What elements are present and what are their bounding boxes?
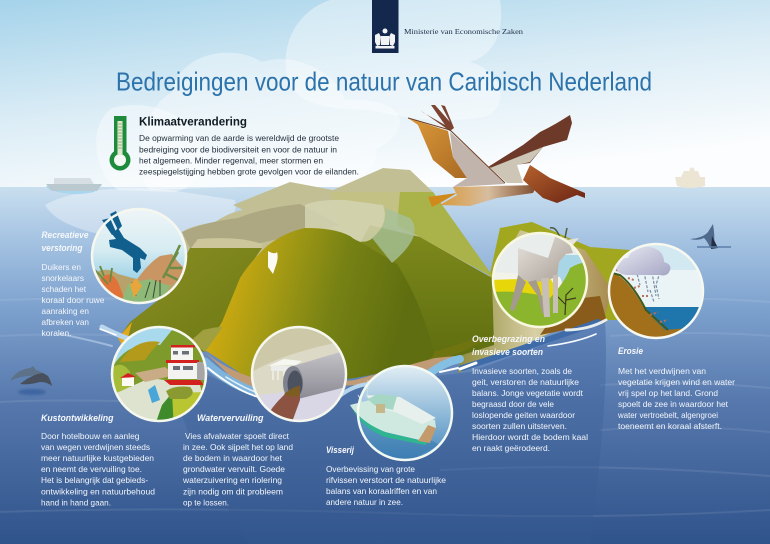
circle rim [112, 327, 206, 421]
body: overbegrazing: Invasieve soorten, zoals de [472, 366, 572, 376]
body: recreatieve verstoring: koralen. [42, 328, 72, 338]
whale tail [690, 224, 731, 249]
light green right slope [397, 192, 494, 278]
background sky [0, 0, 770, 188]
circle rim [358, 366, 452, 460]
foam and waves [60, 320, 606, 400]
body: recreatieve verstoring: schaden het [42, 284, 87, 294]
body: watervervuiling: op te lossen. [183, 498, 229, 508]
pelican [408, 105, 585, 207]
body: erosie: Met het verdwijnen van [618, 366, 706, 376]
body: overbegrazing: balans. Jonge vegetatie wordt [472, 388, 584, 398]
ministry name: Ministerie van Economische Zaken [404, 27, 523, 36]
body: erosie [617, 366, 735, 431]
ministry logo [372, 0, 523, 53]
body: watervervuiling: de bodem in waardoor het [183, 453, 283, 463]
island [118, 168, 630, 392]
klimaat body: zeespiegelstijging hebben grote gevolgen voor de eilanden. [139, 166, 359, 176]
circle illustration: fishing boat [350, 365, 455, 465]
klimaat body [139, 133, 359, 176]
body: kustontwikkeling [41, 431, 155, 508]
klimaat heading: Klimaatverandering [139, 116, 247, 128]
goat figure [510, 228, 579, 317]
body: visserij [326, 464, 446, 507]
body: overbegrazing: en raakt geërodeerd. [472, 443, 550, 453]
overbegrazing text block [472, 334, 588, 453]
body: visserij: Overbevissing van grote [326, 464, 415, 474]
right dark hill [340, 225, 494, 362]
body: recreatieve verstoring: afbreken van [42, 317, 89, 327]
shore sand [205, 352, 455, 392]
body: erosie: spoelt de zee in waardoor het [618, 399, 729, 409]
eroding slope [610, 274, 682, 337]
tan goat slope [458, 230, 612, 373]
klimaat body: het algemeen. Minder regenval, meer stormen en [139, 156, 323, 166]
small house [120, 373, 136, 386]
body: kustontwikkeling: en neemt de vervuiling toe. [41, 464, 142, 474]
body: watervervuiling [182, 431, 293, 508]
body: overbegrazing [472, 366, 588, 453]
plant [556, 288, 576, 315]
circle illustration: erosion [608, 242, 704, 340]
body: recreatieve verstoring: koraal door ruwe [42, 295, 105, 305]
body: kustontwikkeling: ontwikkeling en natuurbehoud [41, 486, 155, 496]
boat [350, 380, 436, 445]
distant ship right [675, 168, 705, 188]
body: watervervuiling: zijn nodig om dit probleem [183, 486, 283, 496]
body: overbegrazing: soorten zullen uitsterven. [472, 421, 567, 431]
rear wing grey [450, 132, 505, 187]
body: overbegrazing: loslopende geiten waardoor [472, 410, 575, 420]
rear wing feathers [420, 105, 454, 131]
heading: overbegrazing [472, 334, 545, 358]
rain cloud [616, 247, 670, 275]
klimaat body: De opwarming van de aarde is wereldwijd de grootste [139, 133, 339, 143]
panel: recreatieve verstoring [42, 230, 105, 338]
body: recreatieve verstoring: Duikers en [42, 262, 81, 272]
body: kustontwikkeling: meer natuurlijke kustgebieden [41, 453, 154, 463]
body: visserij: balans van koraalriffen en van [326, 486, 437, 496]
left hill [120, 248, 262, 352]
diver figure [102, 211, 147, 273]
rear wing orange [408, 118, 467, 178]
clouds behind title [45, 0, 501, 244]
pipe [294, 352, 345, 398]
heading: recreatieve verstoring [42, 230, 89, 254]
body: erosie: water vertroebelt, algengroei [617, 410, 718, 420]
deep water around island [120, 322, 606, 544]
body: erosie: vegetatie krijgen wind en water [618, 377, 735, 387]
dolphins [10, 366, 52, 395]
body: visserij: andere natuur in zee. [326, 497, 403, 507]
circle rim [493, 233, 587, 327]
background sea [0, 187, 770, 544]
rain [636, 275, 660, 302]
body: watervervuiling: in zee. Ook sijpelt het op land [183, 442, 293, 452]
heading: recreatieve verstoring: verstoring [42, 243, 83, 254]
distant boat left [46, 178, 102, 194]
pelican body [440, 185, 537, 206]
body: overbegrazing: Hierdoor wordt de bodem kaal [472, 432, 588, 442]
body: watervervuiling: waterzuivering en riolering [182, 475, 282, 485]
body: kustontwikkeling: Door hotelbouw en aanleg [41, 431, 140, 441]
erosie text block [617, 346, 735, 431]
body: overbegrazing: geit, verstoren de natuurlijke [472, 377, 579, 387]
heading: overbegrazing: Overbegrazing en [472, 334, 545, 345]
circle rim [609, 244, 703, 338]
circle illustration: waste water pipe [250, 325, 350, 425]
logo ribbon [372, 0, 398, 53]
circle rim [92, 209, 186, 303]
pelican head and pouch [523, 165, 585, 203]
klimaatverandering text block [139, 116, 359, 176]
coat of arms [375, 28, 395, 48]
house on stilts [268, 359, 302, 380]
pelican feet [428, 193, 457, 207]
body: kustontwikkeling: hand in hand gaan. [41, 498, 111, 508]
discharge [271, 386, 300, 420]
heading: overbegrazing: invasieve soorten [472, 347, 543, 358]
title: Bedreigingen voor de natuur van Caribisch Nederland [116, 66, 652, 96]
thermometer icon [110, 116, 130, 170]
body: watervervuiling: Vies afvalwater spoelt direct [185, 431, 290, 441]
body: recreatieve verstoring [42, 262, 105, 338]
center hill [205, 228, 434, 385]
heading: visserij: Visserij [326, 445, 354, 456]
circle illustration: coast development [110, 326, 208, 422]
back goat hill [480, 222, 630, 320]
body: watervervuiling: grondwater vervuilt. Goede [183, 464, 285, 474]
watervervuiling text block [182, 413, 293, 508]
body: overbegrazing: begraasd door de vele [472, 399, 554, 409]
haze over hills [305, 200, 385, 242]
hotel building [164, 345, 205, 385]
body: recreatieve verstoring: aanraking en [42, 306, 89, 316]
back hills [182, 168, 480, 300]
circle illustration: diver on coral [90, 208, 188, 304]
klimaat body: bedreiging voor de biodiversiteit en voor de natuur in [139, 144, 337, 154]
white bird [268, 251, 278, 274]
body: kustontwikkeling: Het is belangrijk dat gebieds- [41, 475, 148, 485]
visserij text block [326, 445, 446, 507]
circle rim [252, 327, 346, 421]
front wing [488, 115, 572, 168]
heading: watervervuiling: Watervervuiling [197, 413, 264, 424]
sea streaks [0, 298, 770, 516]
heading: erosie: Erosie [618, 346, 644, 357]
heading: kustontwikkeling: Kustontwikkeling [41, 413, 114, 424]
heading: recreatieve verstoring: Recreatieve [42, 230, 89, 241]
body: recreatieve verstoring: snorkelaars [42, 273, 84, 283]
body: erosie: vrij spel op het land. Grond [618, 388, 718, 398]
body: erosie: toeneemt en koraal afsterft. [618, 421, 722, 431]
body: visserij: rifvissen verstoort de natuurlijke [326, 475, 446, 485]
sea [643, 307, 699, 330]
kustontwikkeling text block [41, 413, 155, 508]
circle illustration: goat [490, 228, 590, 330]
body: kustontwikkeling: van wegen verdwijnen steeds [41, 442, 150, 452]
